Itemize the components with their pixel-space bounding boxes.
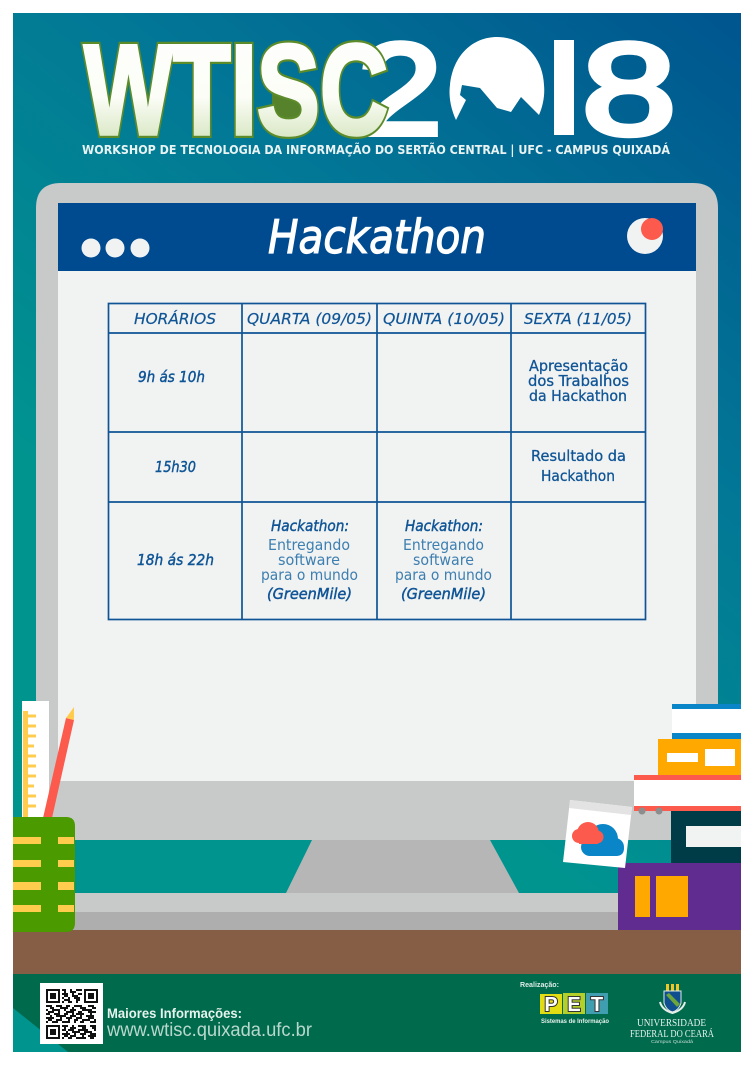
logo: WTISC 2018	[84, 16, 676, 162]
logo digit 8: 8	[582, 16, 676, 162]
time labels: 15h30	[155, 458, 196, 476]
top book	[672, 704, 741, 739]
Wednesday session: Entregando	[268, 536, 350, 554]
website address: www.wtisc.quixada.ufc.br	[106, 1020, 313, 1041]
Friday presentation	[528, 357, 629, 405]
Wednesday session: Hackathon:	[271, 517, 349, 535]
UFC logo: UNIVERSIDADE	[637, 1018, 706, 1029]
logo digit 1	[554, 40, 574, 135]
monitor screen	[58, 271, 696, 781]
book stack	[618, 704, 741, 930]
QR code	[40, 983, 103, 1044]
PET logo	[540, 993, 609, 1025]
logo dome with mountain silhouette	[450, 37, 544, 120]
purple book	[618, 863, 741, 930]
Thursday session	[395, 517, 492, 603]
moon icon	[627, 218, 663, 254]
logo word WTISC fill: WTISC	[84, 19, 388, 162]
stand base top	[60, 893, 630, 912]
organizer label: Realização:	[520, 982, 559, 989]
subtitle: WORKSHOP DE TECNOLOGIA DA INFORMAÇÃO DO SERTÃO CENTRAL | UFC - CAMPUS QUIXADÁ	[82, 142, 671, 157]
stand base bottom	[60, 912, 630, 930]
Friday result	[531, 447, 626, 485]
logo digit 2: 2	[358, 16, 442, 162]
icon: pencil	[43, 707, 74, 818]
Thursday session: software	[413, 551, 474, 569]
red book	[634, 775, 741, 814]
footer band	[13, 974, 741, 1052]
window dots	[82, 238, 150, 258]
table grid	[108, 303, 646, 620]
Wednesday session	[261, 517, 358, 603]
PET logo: Sistemas de Informação	[541, 1019, 609, 1025]
desk	[13, 930, 741, 974]
footer	[13, 974, 741, 1052]
Friday result: Hackathon	[541, 467, 615, 485]
PET logo: T	[591, 994, 603, 1016]
monitor stand	[60, 840, 630, 930]
UFC logo: Campus Quixadá	[651, 1039, 694, 1044]
table header row: QUARTA (09/05)	[247, 310, 372, 328]
PET logo: E	[567, 994, 581, 1016]
Thursday session: Hackathon:	[405, 517, 483, 535]
UFC logo	[630, 984, 714, 1044]
icon: UFC crest	[660, 984, 685, 1013]
time labels: 18h ás 22h	[137, 551, 214, 569]
sticky note with clouds	[563, 800, 632, 868]
icon: blue cloud	[581, 824, 624, 856]
time labels	[137, 368, 214, 569]
icon: pen holder	[13, 817, 75, 932]
heading: Hackathon: Hackathon	[268, 210, 486, 264]
orange book	[658, 739, 741, 775]
dark book	[671, 811, 741, 863]
table header row: HORÁRIOS	[134, 309, 216, 328]
Wednesday session: para o mundo	[261, 566, 358, 584]
time labels: 9h ás 10h	[138, 368, 205, 386]
stand neck	[286, 840, 519, 893]
table header row	[134, 309, 632, 328]
table header row: QUINTA (10/05)	[383, 310, 505, 328]
Thursday session: (GreenMile)	[401, 585, 486, 603]
icon: ruler	[22, 701, 49, 818]
Friday result: Resultado da	[531, 447, 626, 465]
logo S shadow	[272, 85, 304, 125]
icon: red cloud	[572, 822, 604, 844]
UFC logo: FEDERAL DO CEARÁ	[630, 1028, 714, 1040]
logo word WTISC outline: WTISC	[84, 19, 388, 162]
Friday presentation: da Hackathon	[529, 387, 627, 405]
screen header bar	[58, 203, 696, 271]
monitor	[36, 183, 718, 840]
table header row: SEXTA (11/05)	[524, 310, 632, 328]
PET logo: P	[544, 994, 558, 1016]
footer corner accent	[13, 1008, 68, 1052]
Thursday session: para o mundo	[395, 566, 492, 584]
Friday presentation: Apresentação	[529, 357, 628, 375]
Friday presentation: dos Trabalhos	[528, 372, 629, 390]
monitor frame	[36, 183, 718, 840]
more information label: Maiores Informações:	[107, 1005, 242, 1021]
Wednesday session: software	[278, 551, 340, 569]
Thursday session: Entregando	[403, 536, 484, 554]
Wednesday session: (GreenMile)	[267, 585, 352, 603]
schedule table	[108, 303, 646, 620]
